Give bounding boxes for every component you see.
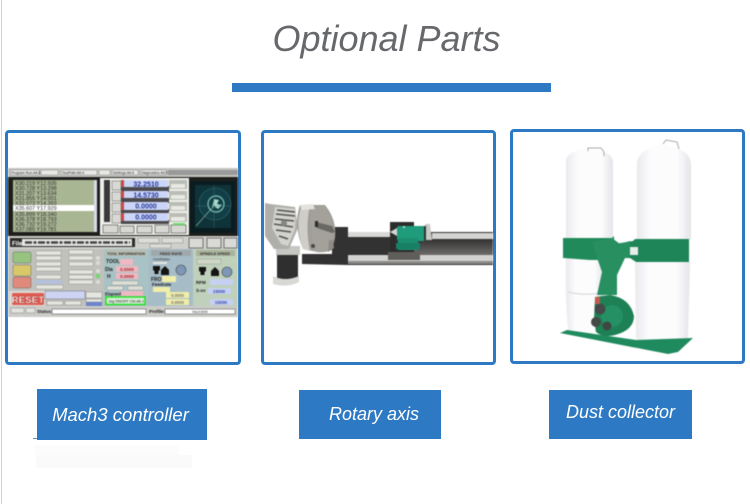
tab strip: Program Run Alt-1 [11, 171, 41, 175]
file row: File [12, 242, 23, 248]
top black display area: X37.085 Y19.781 [15, 227, 57, 233]
control section: Feedrate [152, 282, 172, 287]
top black display area: 32.2510 [133, 182, 159, 188]
title underline bar [232, 83, 551, 92]
control section: Dia [105, 267, 113, 273]
top black display area [8, 177, 238, 236]
control section: OverRidden [153, 258, 170, 262]
control section: Jog ON/OFF Ctrl-Alt-J [108, 300, 144, 304]
control section: FRO [151, 277, 162, 283]
file row [8, 236, 238, 249]
label: Dust collector: Dust collector [566, 402, 675, 422]
status row: Profile: [149, 309, 165, 314]
top black display area: X30.219 Y12.935 [15, 181, 57, 187]
icon: blower and ducts [563, 236, 689, 336]
panel: rotary axis image [261, 130, 496, 365]
control section: 15000 [213, 289, 226, 294]
label: Mach3 controller: Mach3 controller [52, 404, 189, 424]
top black display area: 0.0000 [135, 204, 157, 210]
control section: FEED RATE [160, 251, 183, 256]
icon: green tailstock [388, 222, 432, 260]
control section: 0.0000 [171, 293, 185, 298]
top black display area: X35.899 Y18.340 [15, 212, 57, 218]
top black display area: X32.073 Y14.393 [15, 201, 57, 207]
tab strip: Settings Alt-6 [113, 171, 134, 175]
control section: TOOL INFORMATION [107, 252, 145, 256]
control section: H [107, 274, 111, 280]
tab strip: Diagnostics Alt-7 [141, 171, 168, 175]
control section: RPM [196, 280, 206, 285]
control section [8, 249, 238, 306]
control section: RESET [12, 295, 44, 306]
icon: three-jaw chuck [297, 204, 335, 252]
label: Dust collector [549, 390, 692, 439]
status row: Status: [37, 309, 53, 314]
title: Optional Parts [272, 18, 501, 59]
top black display area: 0.0000 [135, 214, 157, 222]
icon: rotary axis rail bed [302, 227, 493, 265]
status row [8, 306, 238, 317]
control section: S-ov [196, 288, 206, 293]
control section: TOOL [106, 259, 120, 265]
top black display area: X36.378 Y18.793 [15, 217, 57, 223]
top black display area: X31.855 Y14.001 [15, 196, 57, 202]
icon: base plate [560, 330, 693, 354]
top black display area: 14.5730 [133, 192, 159, 200]
label: Mach3 controller [37, 389, 207, 440]
top black display area: X36.732 Y19.272 [15, 222, 57, 228]
control section: 0.0000 [120, 267, 134, 272]
tab strip: ToolPath Alt-4 [62, 171, 84, 175]
control section: 0.0000 [171, 300, 185, 305]
top black display area: X35.607 Y17.929 [15, 206, 57, 212]
control section: Elapsed [105, 292, 122, 296]
panel: dust collector image [510, 129, 745, 364]
top black display area: X30.728 Y13.298 [15, 186, 57, 192]
icon: left dust bag [566, 148, 613, 334]
status row: Mach3Mill [192, 310, 208, 314]
icon: stepper motor [273, 246, 300, 286]
control section: 15000 [215, 300, 228, 305]
control section: SPINDLE SPEED [200, 252, 230, 256]
label: Rotary axis: Rotary axis [329, 404, 419, 424]
icon: right dust bag [635, 140, 691, 343]
icon: gearbox [265, 203, 298, 249]
control section: 0.0000 [120, 274, 134, 279]
label: Rotary axis [299, 390, 441, 439]
top black display area: X31.207 Y13.634 [15, 191, 57, 197]
tab strip [8, 168, 238, 177]
panel: Mach3 controller screenshot [5, 130, 241, 365]
